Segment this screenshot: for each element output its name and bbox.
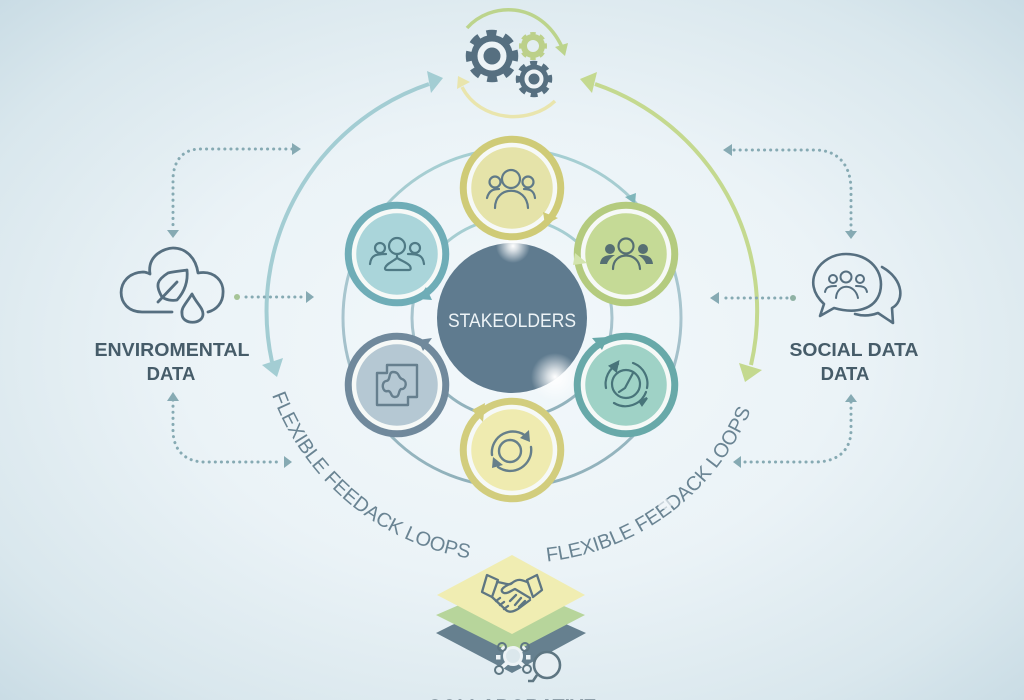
label: flexible feedack loops right: FLEXIBLE FEEDACK LOOPS (546, 406, 750, 562)
arrow: top green cycle (467, 10, 568, 56)
icon: people group (487, 170, 535, 208)
social data: connector arrowheads (710, 144, 857, 468)
icon: handshake (482, 575, 542, 612)
label: flexible feedack loops left: FLEXIBLE FEEDACK LOOPS (272, 391, 470, 558)
icon: compass cycle (606, 362, 647, 406)
gear: small green (520, 34, 546, 58)
icon: refresh cycle (492, 430, 531, 471)
icon: people filled sides (600, 238, 653, 269)
node: lower left puzzle (348, 336, 446, 434)
node: upper left people (348, 206, 446, 302)
icon: speech bubbles (813, 254, 900, 323)
icon: people on tray (370, 238, 424, 270)
label: social data data: SOCIAL DATA (790, 339, 918, 360)
arrow: left teal loop arc (262, 71, 443, 377)
ring arrowhead (625, 193, 636, 204)
label: enviromental data: ENVIROMENTAL (94, 339, 250, 360)
icon: network and magnifier (495, 643, 560, 681)
environmental data: dotted connectors (173, 149, 306, 462)
node: bottom cycle (464, 402, 560, 498)
hub label: STAKEOLDERS (448, 311, 576, 332)
label: social data data: DATA (821, 363, 869, 384)
label: social data data (790, 339, 918, 384)
social data: dotted connectors (720, 150, 851, 462)
outer and inner rings (343, 149, 681, 487)
node: lower right compass cycle (578, 336, 674, 434)
icon: gears cycle (457, 10, 568, 117)
node: top stakeholders (464, 140, 560, 236)
gear: large (469, 33, 515, 79)
node: upper right people (573, 206, 674, 302)
label: enviromental data: DATA (147, 363, 195, 384)
highlight glows (496, 229, 579, 401)
center hub: stakeolders (437, 243, 587, 393)
environmental data: connector arrowheads (167, 143, 314, 468)
arrow: bottom yellow cycle (457, 76, 555, 117)
icon: puzzle (377, 365, 417, 405)
text glint (658, 499, 672, 509)
icon: cloud leaf drop (121, 248, 223, 322)
gear: medium (518, 63, 550, 95)
arrow: right green loop arc (580, 72, 762, 382)
label: enviromental data (94, 339, 250, 384)
layered collaboration stack (436, 555, 586, 681)
